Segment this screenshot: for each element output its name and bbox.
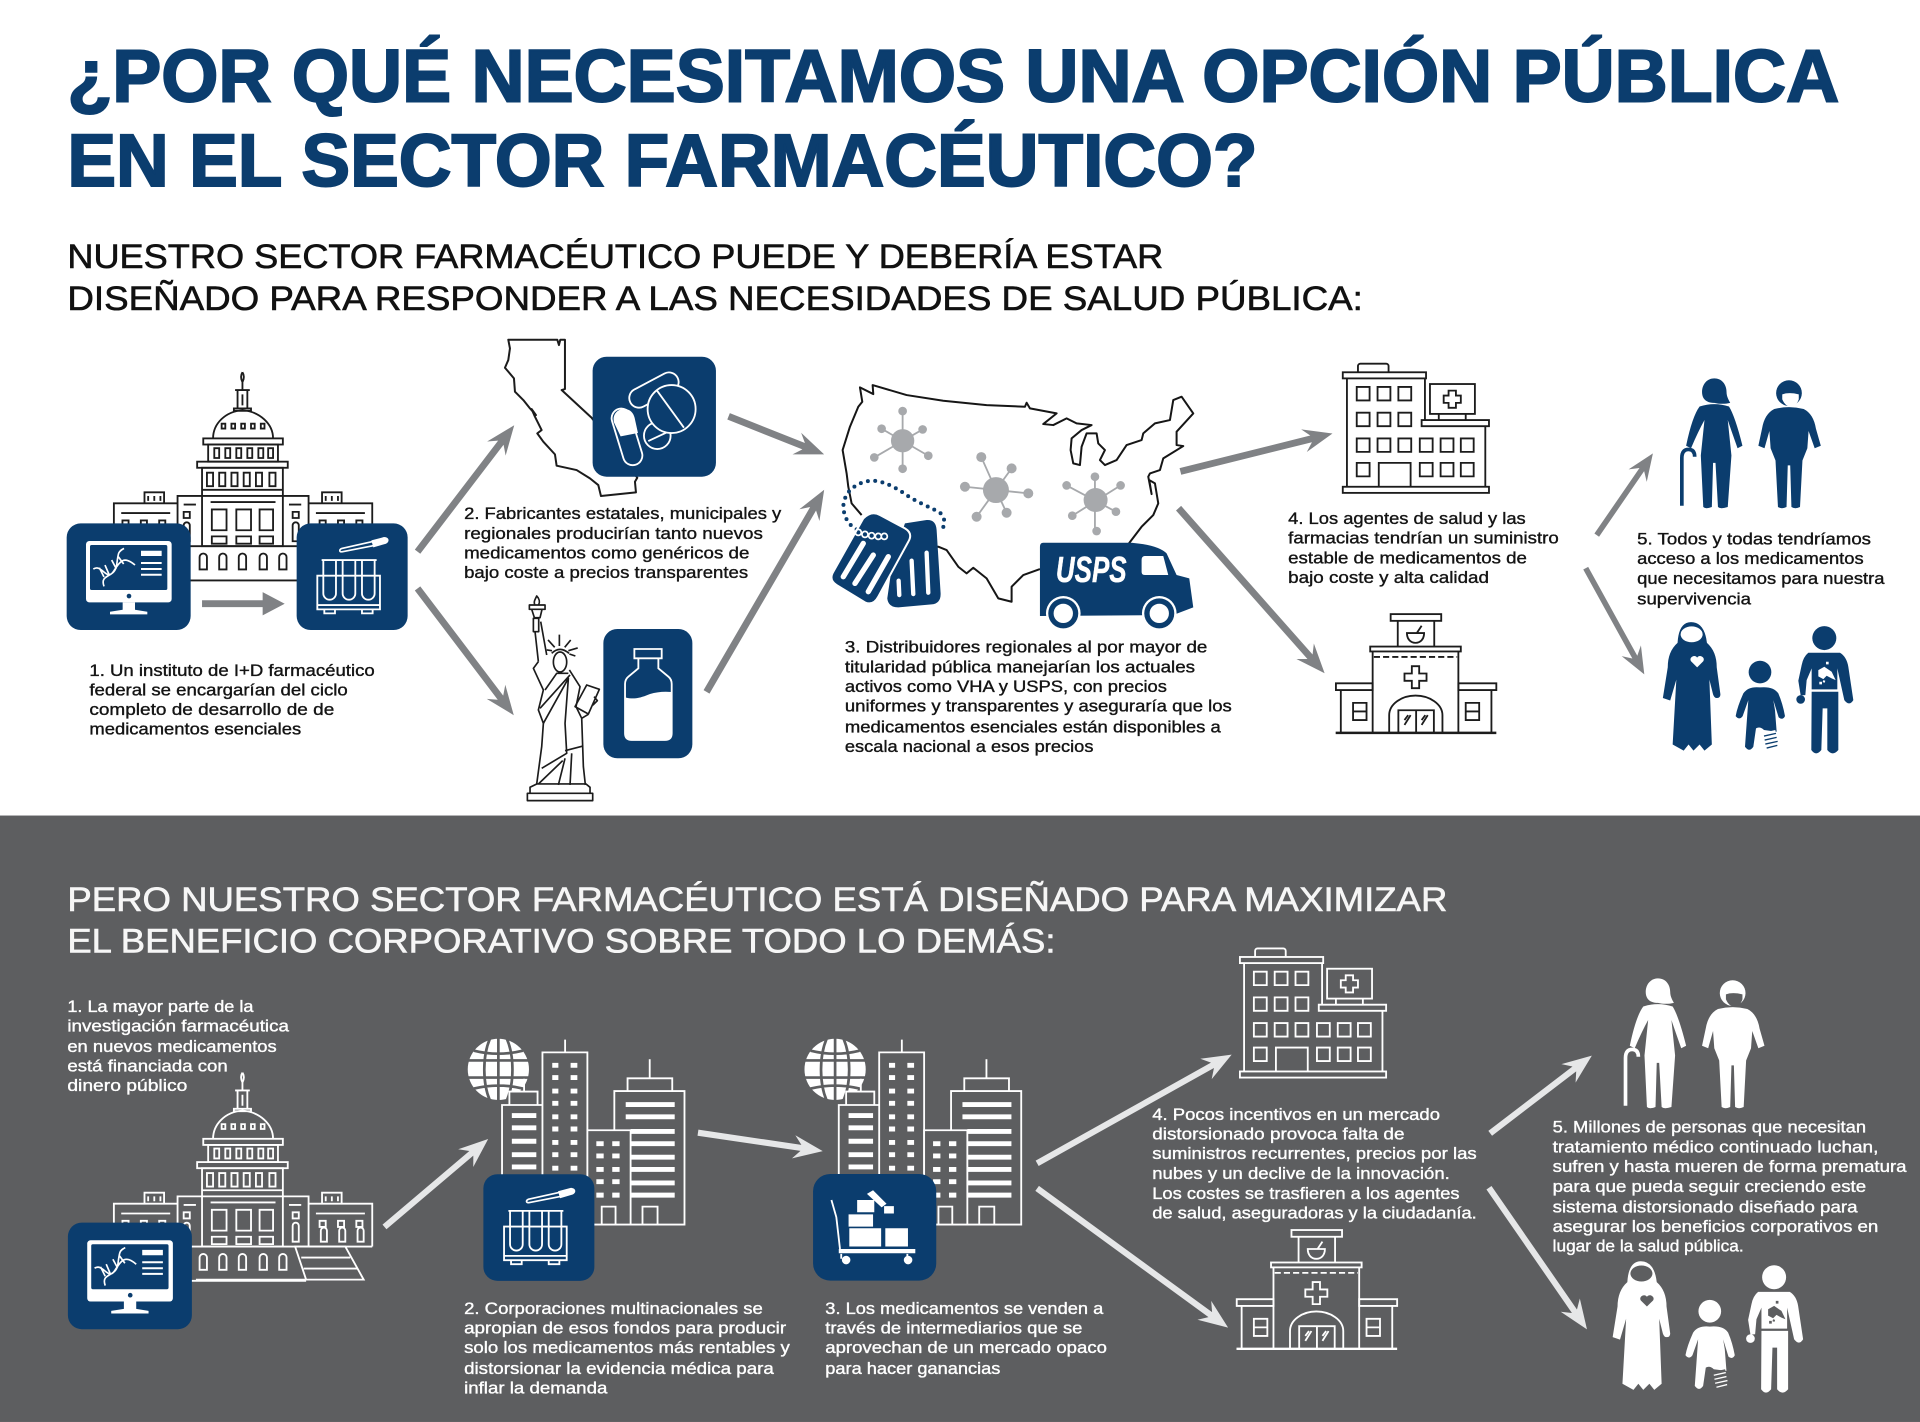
icon: hospital [1240,948,1386,1078]
text: step 4 [1288,509,1559,587]
arrow: step 1 to California [408,418,523,559]
text: step 3: escala nacional a esos precios [845,737,1093,756]
text: step 5: sufren y hasta mueren de forma prematura [1553,1157,1907,1176]
white background [0,0,1920,817]
text: step 2: medicamentos como genéricos de [464,543,749,562]
icon: vial [603,629,692,758]
icon: California outline [505,340,637,496]
title [67,35,1839,202]
arrow: corporations to intermediaries [696,1121,824,1163]
arrow: to hospital [1031,1044,1237,1173]
icon: USPS truck [1040,543,1193,631]
text: step 3: aprovechan de un mercado opaco [825,1338,1107,1357]
arrow: distributors to pharmacy [1170,500,1333,681]
title: EN EL SECTOR FARMACÉUTICO? [67,119,1258,202]
text: step 5: asegurar los beneficios corporativos en [1553,1217,1878,1236]
text: step 1: en nuevos medicamentos [67,1037,277,1056]
title: ¿POR QUÉ NECESITAMOS UNA OPCIÓN PÚBLICA [67,35,1839,118]
heading: corporate profit [67,880,1447,961]
text: step 5: 5. Millones de personas que necesitan [1553,1118,1866,1137]
text: step 1: completo de desarrollo de de [89,700,334,719]
arrow: to family [1479,1181,1597,1336]
text: step 2: 2. Fabricantes estatales, municipales y [464,504,782,523]
arrow: California to distributors [724,406,828,465]
text: step 4: bajo coste y alta calidad [1288,568,1489,587]
icon: computer with DNA [67,523,191,630]
arrow: to older couple [1588,447,1662,541]
arrow: step 1 to New York [408,581,523,722]
icon: pharmacy [1336,614,1496,733]
heading: corporate profit: EL BENEFICIO CORPORATIVO SOBRE TODO LO DEMÁS: [67,922,1056,961]
text: step 1: dinero público [67,1076,187,1095]
heading: public health design [67,237,1363,318]
text: step 2: bajo coste a precios transparentes [464,563,748,582]
arrow: distributors to hospital [1178,422,1335,483]
icon: US map [843,385,1193,602]
text: step 1 [67,997,290,1095]
text: step 1: 1. Un instituto de I+D farmacéutico [89,661,375,680]
text: step 3: para hacer ganancias [825,1359,1000,1378]
icon: Statue of Liberty [527,596,599,801]
text: step 1: está financiada con [67,1056,228,1075]
arrow: to pharmacy [1030,1179,1235,1337]
heading: public health design: DISEÑADO PARA RESPONDER A LAS NECESIDADES DE SALUD PÚBLICA: [67,279,1363,318]
icon: test tubes [297,523,408,630]
panel: corporate profit flow [0,816,1920,1422]
text: step 3: uniformes y transparentes y aseguraría que los [845,696,1232,715]
text: step 3: activos como VHA y USPS, con precios [845,677,1167,696]
icon: family group [1613,1261,1803,1393]
icon: capitol building [114,1073,372,1281]
text: step 2 [464,504,782,582]
text: step 2: apropian de esos fondos para producir [464,1318,787,1337]
arrow: New York to distributors [696,484,834,698]
text: step 5 [1637,530,1885,608]
icon: computer with DNA [68,1223,192,1329]
text: step 5: acceso a los medicamentos [1637,549,1864,568]
text: step 2: distorsionar la evidencia médica para [464,1359,775,1378]
text: step 2: inflar la demanda [464,1378,608,1397]
text: step 3 [845,638,1232,756]
icon: intermediary towers [804,1038,1021,1225]
icon: USPS truck: USPS [1056,549,1127,590]
text: step 2 [464,1299,791,1398]
icon: family group [1663,622,1853,753]
text: step 5 [1553,1118,1907,1255]
heading: public health design: NUESTRO SECTOR FARMACÉUTICO PUEDE Y DEBERÍA ESTAR [67,237,1163,276]
icon: dog tags [831,481,944,607]
icon: corporate towers [468,1038,684,1225]
text: step 5: lugar de la salud pública. [1553,1236,1744,1255]
icon: pills [593,357,716,477]
text: step 4: nubes y un declive de la innovación. [1152,1164,1450,1183]
text: step 3 [825,1299,1107,1378]
text: step 4: 4. Los agentes de salud y las [1288,509,1526,528]
text: step 4: suministros recurrentes, precios por las [1152,1144,1477,1163]
text: step 4: Los costes se trasfieren a los agentes [1152,1184,1460,1203]
text: step 2: solo los medicamentos más rentables y [464,1338,791,1357]
icon: test tubes [483,1174,594,1281]
text: step 4: de salud, aseguradoras y la ciudadanía. [1152,1203,1477,1222]
arrow: public money to corporations [377,1130,496,1236]
text: step 5: sistema distorsionado diseñado para [1553,1197,1858,1216]
text: step 1: medicamentos esenciales [89,720,301,739]
text: step 1: 1. La mayor parte de la [67,997,254,1016]
icon: older couple [1626,978,1764,1108]
text: step 3: medicamentos esenciales están disponibles a [845,717,1222,736]
icon: pharmacy [1236,1230,1397,1349]
text: step 4: 4. Pocos incentivos en un mercado [1152,1105,1440,1124]
text: step 1 [89,661,375,739]
text: step 5: que necesitamos para nuestra [1637,569,1885,588]
icon: older couple [1682,378,1821,508]
arrow: to older couple [1483,1046,1599,1143]
dark panel background [0,816,1920,1422]
icon: capitol steps [196,1247,364,1280]
text: step 4 [1152,1105,1477,1222]
text: step 1: investigación farmacéutica [67,1017,290,1036]
arrow: computer to test tubes [202,592,285,615]
arrow: to family [1576,563,1654,680]
text: step 5: para que pueda seguir creciendo este [1553,1177,1866,1196]
text: step 3: través de intermediarios que se [825,1318,1082,1337]
icon: hospital [1343,364,1489,493]
icon: capitol building [114,372,372,580]
panel: public health flow [67,340,1885,801]
text: step 4: estable de medicamentos de [1288,548,1527,567]
text: step 3: titularidad pública manejarían los actuales [845,657,1195,676]
text: step 4: distorsionado provoca falta de [1152,1124,1404,1143]
text: step 5: tratamiento médico continuado luchan, [1553,1137,1878,1156]
text: step 2: regionales producirían tanto nuevos [464,524,763,543]
icon: viruses [870,407,1125,535]
text: step 3: 3. Los medicamentos se venden a [825,1299,1104,1318]
text: step 5: 5. Todos y todas tendríamos [1637,530,1871,549]
heading: corporate profit: PERO NUESTRO SECTOR FARMACÉUTICO ESTÁ DISEÑADO PARA MAXIMIZAR [67,880,1447,919]
text: step 2: 2. Corporaciones multinacionales se [464,1299,763,1318]
text: step 4: farmacias tendrían un suministro [1288,529,1559,548]
text: step 3: 3. Distribuidores regionales al por mayor de [845,638,1207,657]
text: step 5: supervivencia [1637,589,1752,608]
text: step 1: federal se encargarían del ciclo [89,681,348,700]
icon: cart with boxes [813,1174,936,1281]
